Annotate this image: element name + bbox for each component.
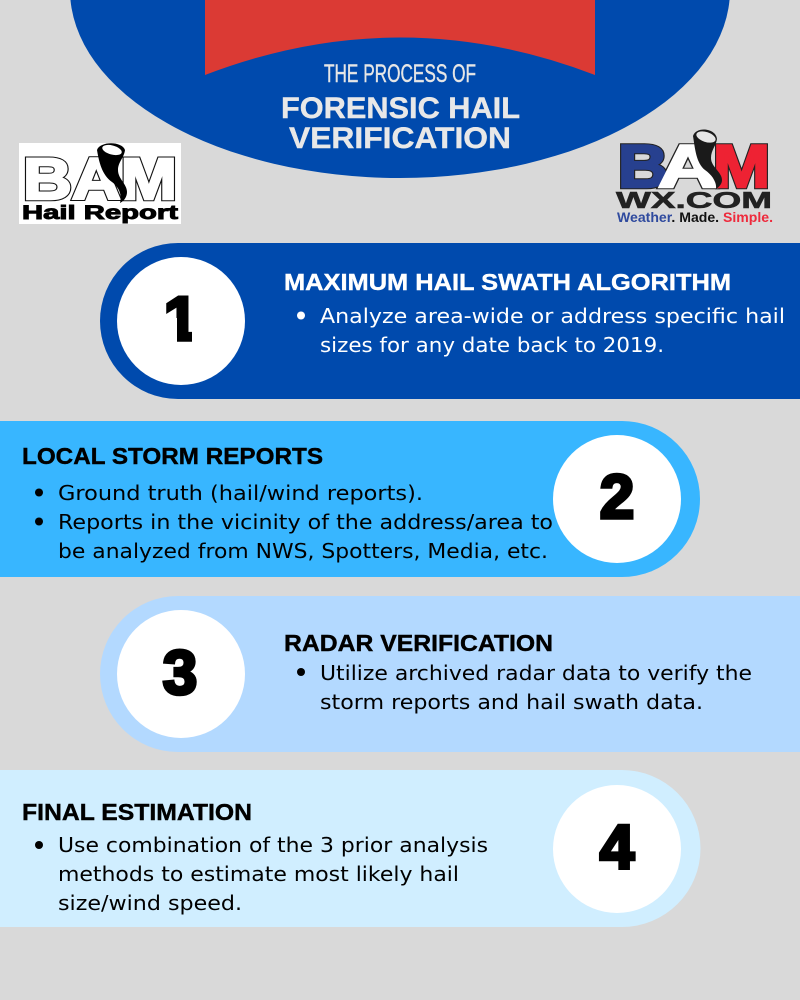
bullet list: methods to estimate most likely hail [58,862,459,886]
bullet list: Use combination of the 3 prior analysis [58,833,488,857]
letter outlines: M [713,133,770,200]
panel background [0,421,700,577]
letter M: M [713,133,770,200]
bullet list [35,833,488,915]
panel background [100,243,800,399]
heading: RADAR VERIFICATION [284,630,553,656]
letter outlines [618,133,770,200]
number badge 3 [117,610,245,738]
icon: tornado [693,129,722,189]
bullet list: size/wind speed. [58,891,242,915]
tagline: Weather. Made. Simple. [617,210,773,225]
title [281,92,520,155]
number badge 1 [117,257,245,385]
red ribbon [205,0,595,75]
header [70,0,730,178]
panel: step 2 [0,421,700,577]
bullet list: be analyzed from NWS, Spotters, Media, etc. [58,539,548,563]
bullet list: storm reports and hail swath data. [320,690,703,714]
bullet list [297,661,752,714]
logo: BAM Hail Report [19,143,181,224]
header blue ellipse [70,0,730,178]
panel background [100,596,800,752]
number badge 2 [553,435,681,563]
number badge 2: 2 [600,463,634,532]
letter A: A [658,133,718,200]
heading: MAXIMUM HAIL SWATH ALGORITHM [284,269,731,295]
number badge 4: 4 [600,813,635,882]
WX.COM wordmark: WX.COM [616,187,772,213]
bullet list: Ground truth (hail/wind reports). [58,481,423,505]
icon: tornado [97,143,127,203]
number badge 4 [553,785,681,913]
BAM lettering: BAM [23,147,177,212]
title: VERIFICATION [289,122,511,155]
panel: step 3 [100,596,800,752]
logo: BAM WX.COM [616,129,773,225]
bullet list: sizes for any date back to 2019. [320,333,664,357]
letter outlines: A [658,133,718,200]
subtitle: THE PROCESS OF [324,60,476,88]
panel: step 1 [100,243,800,399]
heading: FINAL ESTIMATION [22,799,252,825]
logo caption: Hail Report [22,203,179,224]
title: FORENSIC HAIL [281,92,520,125]
number badge 1: 1 [164,285,198,354]
bullet list [297,304,785,357]
letter B: B [618,133,668,200]
heading: LOCAL STORM REPORTS [22,443,323,469]
letter outlines: B [618,133,668,200]
logo background [19,143,181,224]
bullet list [35,481,553,563]
bullet list: Reports in the vicinity of the address/area to [58,510,553,534]
number badge 3: 3 [163,639,197,708]
bullet list: Utilize archived radar data to verify the [320,661,752,685]
BAM lettering: BAM [23,147,177,212]
panel background [0,770,700,927]
panel: step 4 [0,770,700,927]
bullet list: Analyze area-wide or address specific hail [320,304,785,328]
